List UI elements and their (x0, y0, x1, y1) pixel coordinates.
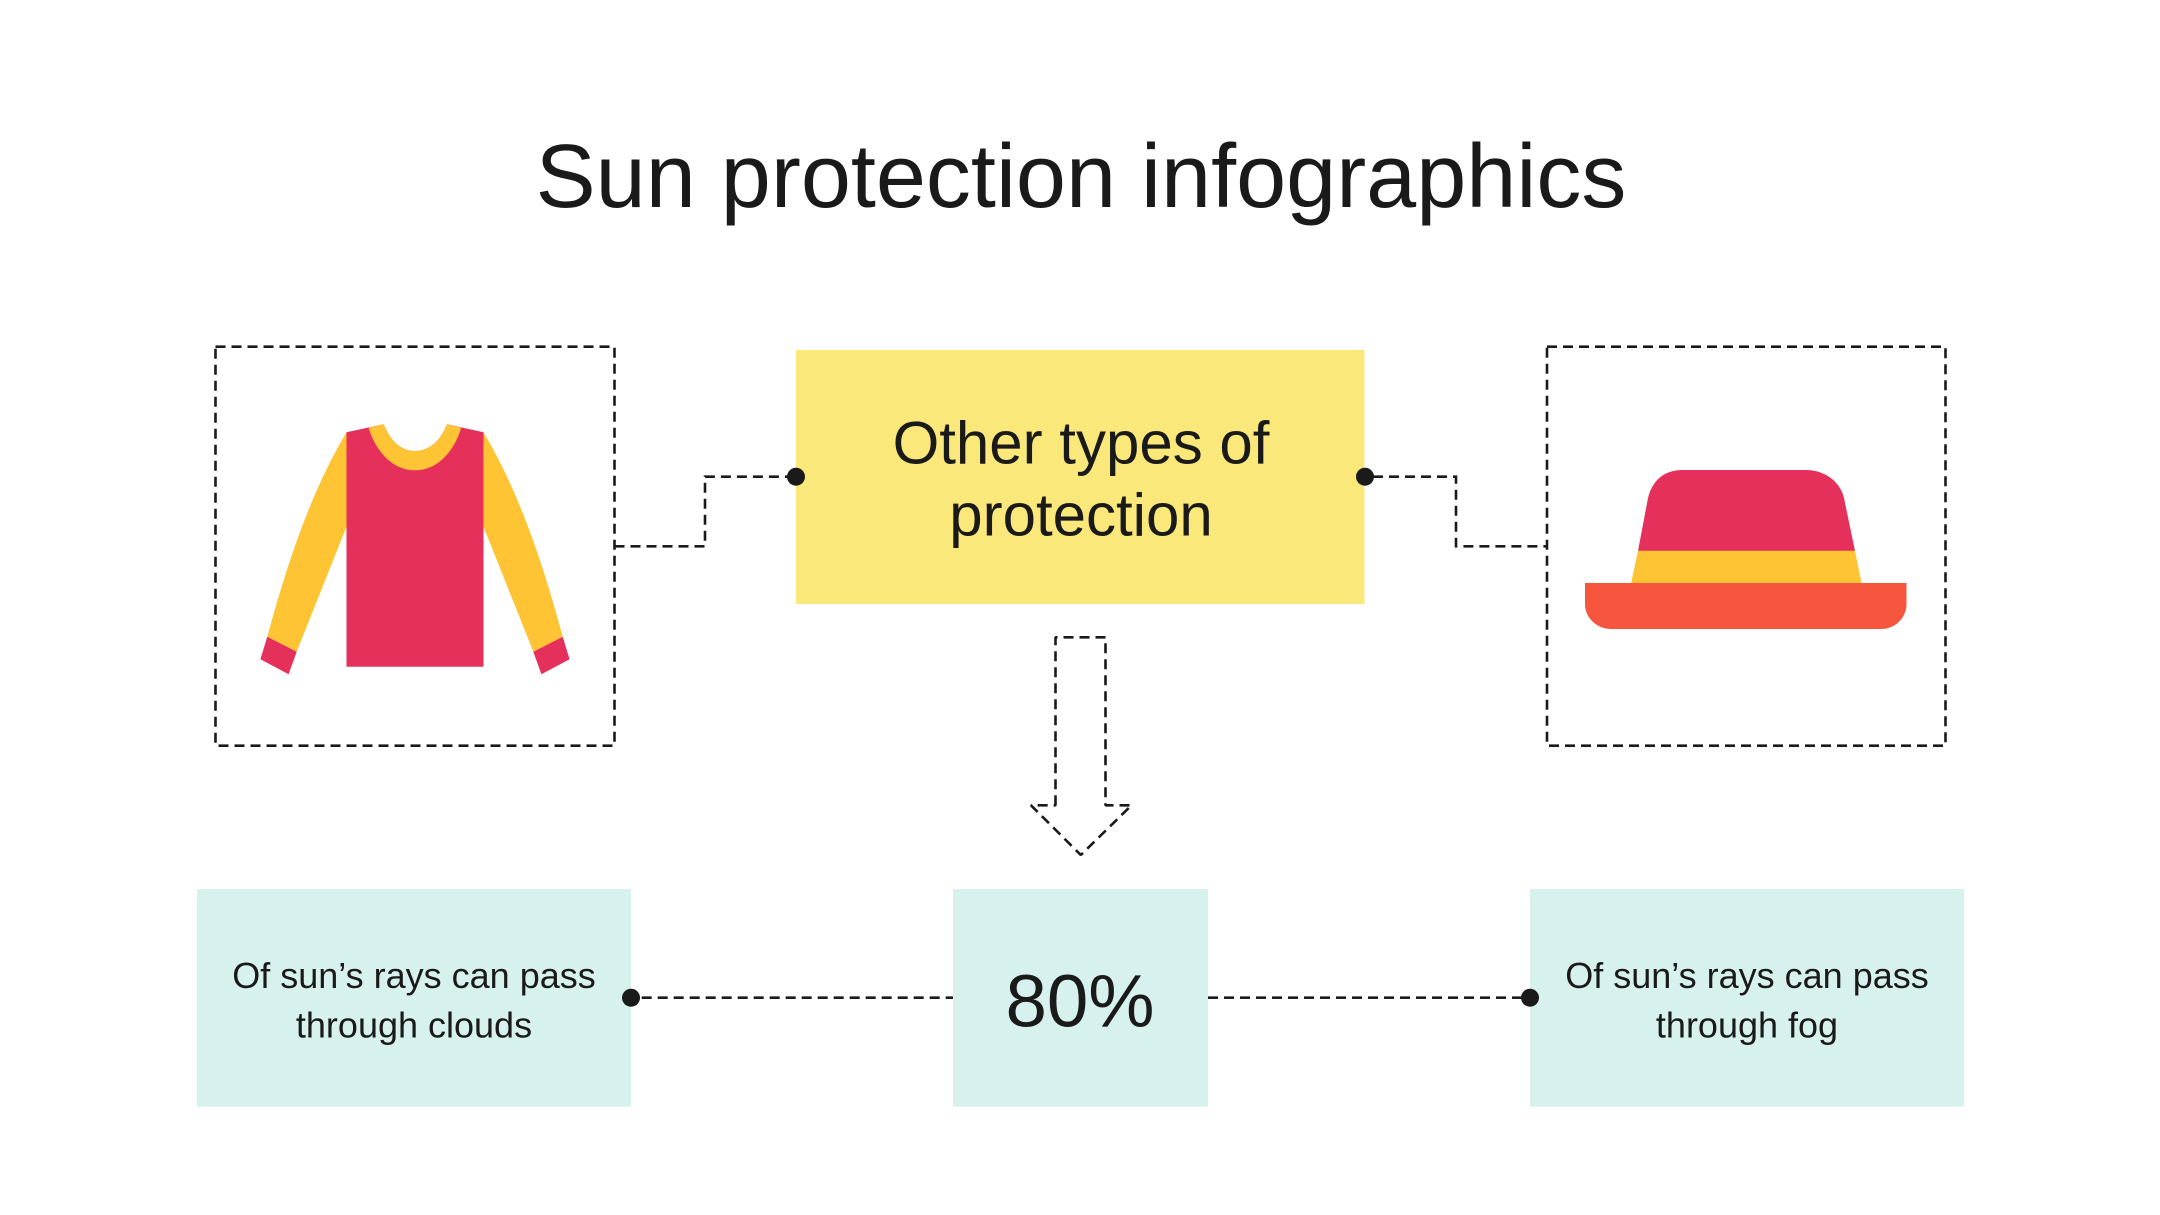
text: through fog: through fog (1656, 1005, 1838, 1046)
heading: other types of protection: Other types of (893, 410, 1270, 477)
panel: 80% stat (953, 889, 1208, 1107)
connector dot: fog (1521, 989, 1539, 1007)
connector: centre box to hat (1373, 477, 1547, 546)
panel: fog fact (1530, 889, 1964, 1107)
stat: 80%: 80% (1005, 960, 1155, 1043)
connector dot: clouds (622, 989, 640, 1007)
arrow: dashed down arrow (1031, 637, 1132, 855)
icon: hat (1585, 470, 1906, 629)
title: Sun protection infographics (536, 127, 1626, 227)
text: through clouds: through clouds (296, 1005, 532, 1046)
connector dot: left of centre box (787, 468, 805, 486)
panel: other types of protection (796, 350, 1364, 604)
panel: clothing icon frame (216, 347, 614, 746)
panel: clouds fact (197, 889, 631, 1107)
text: through fog: Of sun’s rays can pass (1565, 955, 1929, 996)
heading: other types of protection: protection (949, 482, 1213, 549)
connector: clouds to 80% (642, 996, 953, 999)
connector: clothing to centre box (614, 477, 796, 546)
icon: long sleeve shirt (260, 424, 570, 674)
text: through clouds: Of sun’s rays can pass (232, 955, 596, 996)
panel: hat icon frame (1547, 347, 1946, 746)
connector: 80% to fog (1208, 996, 1530, 999)
connector dot: right of centre box (1356, 468, 1374, 486)
